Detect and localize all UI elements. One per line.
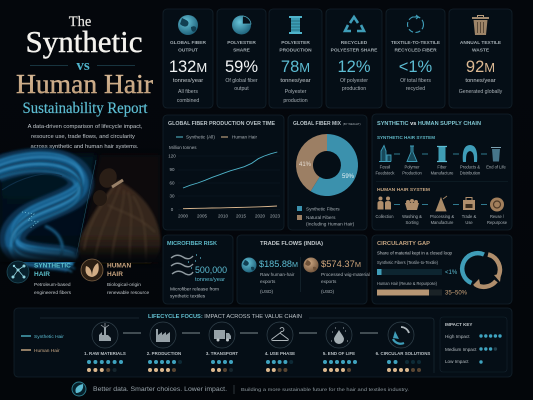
heading: GLOBAL FIBER MIX (293, 121, 341, 127)
stage labels: Distribution (460, 170, 481, 176)
donut legend (297, 206, 355, 226)
impact key: IMPACT KEY (445, 322, 472, 327)
axis labels: 2023 (270, 214, 281, 218)
stat card: polyester share (217, 9, 266, 108)
impact key: High Impact (445, 334, 470, 339)
label: PRODUCTION (279, 48, 312, 54)
description: combined (177, 98, 199, 104)
axis labels: 0 (171, 207, 174, 212)
icon: spool (289, 17, 302, 33)
description: All fibers (178, 89, 198, 95)
processed exports (304, 258, 370, 294)
synthetic hair label (7, 261, 72, 296)
stage labels: Products & (460, 164, 480, 170)
stage labels: Trade & (462, 214, 476, 219)
value: 132M (169, 58, 207, 76)
stage labels: Collection (376, 214, 394, 219)
human description: Biological-origin (107, 282, 141, 288)
subheading: Share of material kept in a closed loop (377, 250, 452, 256)
axis labels (168, 145, 281, 218)
subtitle: Sustainability Report (22, 100, 148, 117)
icon: tan globe (304, 258, 318, 272)
legend: Human Hair (34, 348, 60, 354)
stage 6: circular solutions: 6. CIRCULAR SOLUTIONS (376, 351, 430, 356)
unit: tonnes/year (280, 78, 311, 84)
stage 2: production (147, 322, 182, 372)
stage labels: Reuse / (490, 214, 505, 219)
label: POLYESTER SHARE (331, 48, 378, 54)
description: Of global fiber (225, 78, 258, 84)
human hair label (81, 259, 149, 296)
title: vs with rules: vs (76, 58, 90, 74)
chart legend: Synthetic (All) (186, 134, 215, 140)
donut chart: 41% (299, 162, 312, 168)
title: Human Hair: Human Hair (16, 68, 153, 99)
panel: global fiber mix: (BY WEIGHT) (343, 122, 361, 126)
donut legend: Natural Fibers (306, 215, 336, 220)
value: 500,000 (195, 265, 227, 276)
legend (21, 334, 64, 354)
axis labels: 2010 (218, 214, 229, 218)
icon: waves and particles (171, 255, 201, 275)
icon: collection people (378, 196, 391, 210)
stage 3: transport: 3. TRANSPORT (206, 351, 238, 356)
axis labels: 2005 (197, 214, 208, 218)
description: production (342, 86, 366, 92)
unit: tonnes/year (465, 78, 496, 84)
donut chart: 59% (342, 174, 355, 180)
axis labels: 2000 (178, 214, 189, 218)
stage labels: Production (402, 170, 423, 176)
label: OUTPUT (178, 48, 198, 54)
icon: trade box (463, 198, 475, 210)
panel: supply chain (372, 114, 512, 230)
synthetic system: SYNTHETIC HAIR SYSTEM (377, 135, 435, 141)
description: Processed wig-material (321, 272, 370, 277)
unit: tonnes/year (173, 78, 203, 84)
impact key (440, 317, 507, 372)
line: synthetic (183, 152, 277, 188)
heading: SYNTHETIC vs HUMAN SUPPLY CHAIN (377, 121, 481, 127)
heading: CIRCULARITY GAP (377, 241, 430, 247)
axis labels: 30 (169, 194, 175, 198)
intro text: resource use, trade flows, and circularity (31, 134, 135, 140)
label: WASTE (472, 48, 490, 54)
axis labels: Million tonnes (169, 145, 197, 150)
stage labels: Manufacture (431, 170, 454, 176)
stage labels: Sorting (406, 220, 419, 225)
stage 3: transport (206, 322, 238, 372)
icon: reuse circle (490, 198, 504, 212)
icon: trash bin (472, 16, 489, 35)
panel: microfiber risk (163, 235, 233, 304)
value: 12% (337, 58, 371, 76)
description: Of total fibers (400, 78, 431, 84)
stage labels: Repurpose (487, 220, 508, 225)
description: recycled (406, 86, 425, 92)
axis labels: 2015 (236, 214, 247, 218)
chart legend (176, 134, 257, 140)
icon: fiber spool (437, 146, 447, 162)
donut legend: (Including Human Hair) (306, 222, 355, 226)
label: POLYESTER (281, 40, 310, 46)
impact key: Low Impact (445, 359, 469, 364)
legend: Synthetic Hair (34, 334, 64, 340)
label: RECYCLED (341, 40, 368, 46)
icon: washing basin (405, 199, 419, 210)
synthetic description: Petroleum-based (34, 282, 71, 288)
icon: molecule (7, 261, 29, 283)
panel: lifecycle focus (14, 308, 512, 377)
icon: polymer flask (407, 146, 417, 162)
stat card: polyester production (269, 9, 322, 108)
icon: recycle (345, 17, 364, 31)
impact key: Medium Impact (445, 347, 477, 352)
donut legend: Synthetic Fibers (306, 206, 340, 212)
donut chart (296, 134, 358, 196)
stage 5: end of life: 5. END OF LIFE (323, 351, 355, 356)
stage labels: Use (465, 220, 473, 225)
stat card: recycled polyester share (326, 9, 382, 108)
panel: trade flows (237, 235, 370, 304)
icon: pie (232, 16, 251, 34)
closing statement: Building a more sustainable future for the hair and textiles industry. (241, 387, 409, 393)
icon: teal globe (242, 258, 256, 272)
panel: line chart (163, 115, 284, 230)
bar: synthetic (377, 260, 458, 276)
arrows (123, 332, 378, 334)
description: Polyester (285, 89, 307, 95)
heading: MICROFIBER RISK (167, 241, 217, 247)
icon: bin (491, 148, 501, 162)
description: (USD) (260, 289, 273, 294)
axis labels: 60 (169, 180, 175, 186)
divider (75, 160, 96, 262)
stage labels: Fossil (380, 164, 390, 170)
description: Generated globally (459, 89, 503, 95)
description: Of polyester (340, 78, 368, 84)
description: synthetic textiles (170, 294, 206, 300)
ring chart (462, 253, 501, 288)
stage 5: end of life (323, 322, 357, 372)
stage 2: production: 2. PRODUCTION (147, 351, 181, 356)
title: Synthetic: Synthetic (26, 24, 142, 59)
label: SHARE (233, 48, 251, 54)
stat card: textile-to-textile recycled fiber (386, 9, 445, 108)
description: (USD) (321, 289, 334, 294)
stage 1: raw materials (84, 322, 126, 372)
icon: fossil feedstock (379, 146, 391, 162)
human heading: HAIR (107, 271, 123, 278)
stage labels: Processing & (430, 214, 454, 219)
human hair bundle (78, 155, 161, 264)
stage labels: End of Life (486, 164, 507, 170)
bar: synthetic: <1% (445, 270, 458, 276)
description: Raw human-hair (260, 272, 295, 277)
stage labels: Fiber (437, 164, 447, 170)
description: production (283, 98, 308, 104)
value: $185.88M (259, 259, 298, 270)
intro text: across synthetic and human hair systems. (31, 144, 139, 150)
chart heading: GLOBAL FIBER PRODUCTION OVER TIME (168, 121, 275, 127)
icon: globe (178, 15, 198, 35)
value: 59% (225, 58, 258, 76)
hero image: synthetic and human hair (0, 153, 162, 272)
value: 92M (466, 58, 495, 76)
heading: TRADE FLOWS (INDIA) (260, 241, 323, 247)
value: 78M (281, 58, 310, 76)
human heading: HUMAN (107, 262, 131, 270)
icon: processing hair tool (436, 196, 447, 211)
axis labels: 90 (169, 167, 175, 172)
unit: tonnes/year (195, 277, 225, 283)
value: <1% (399, 58, 433, 76)
panel: circularity gap (372, 235, 512, 304)
synthetic heading: SYNTHETIC (34, 262, 71, 270)
description: output (234, 86, 249, 92)
label: RECYCLED FIBER (394, 48, 437, 54)
synthetic description: engineered fibers (34, 290, 72, 296)
icon: dashed circular arrow (408, 15, 424, 32)
axis labels: 2020 (255, 214, 266, 218)
title: The: The (69, 14, 91, 30)
footer (72, 382, 409, 396)
label: TEXTILE-TO-TEXTILE (391, 40, 441, 46)
tagline: Better data. Smarter choices. Lower impact. (93, 386, 227, 393)
description: Microfiber release from (170, 286, 219, 292)
arrows (394, 204, 487, 206)
label: POLYESTER (227, 40, 256, 46)
stage 1: raw materials: 1. RAW MATERIALS (84, 351, 126, 356)
human system (376, 187, 508, 225)
stage 4: use phase: 4. USE PHASE (265, 351, 295, 356)
description: exports (321, 279, 337, 284)
stage 6: circular solutions (376, 322, 430, 372)
label: GLOBAL FIBER (170, 40, 206, 46)
stat card: annual textile waste (449, 9, 512, 108)
raw exports (242, 258, 298, 294)
line: human hair (183, 206, 277, 209)
heading: LIFECYCLE FOCUS: IMPACT ACROSS THE VALUE CHAIN (148, 314, 302, 320)
synthetic heading: HAIR (34, 271, 50, 278)
panel: global fiber mix (288, 115, 367, 230)
icon: leaf badge (72, 382, 86, 396)
stage labels: Feedstock (376, 170, 395, 176)
value: $574.37M (321, 259, 361, 270)
icon: products wig (463, 145, 477, 162)
human system: HUMAN HAIR SYSTEM (377, 187, 430, 193)
title block (16, 14, 153, 150)
intro text: A data-driven comparison of lifecycle impact, (28, 124, 143, 130)
arrows (394, 153, 487, 155)
stage labels: Polymer (404, 164, 420, 170)
bar: human hair: Human Hair (Reuse & Repurpose) (377, 281, 438, 286)
description: exports (260, 279, 276, 284)
stat card: global fiber output (163, 9, 213, 108)
human description: renewable resource (107, 290, 149, 296)
bar: human hair (377, 281, 468, 296)
label: ANNUAL TEXTILE (460, 40, 502, 46)
stage labels: Washing & (402, 214, 422, 219)
chart legend: Human Hair (232, 134, 257, 140)
synthetic hair strands (0, 153, 96, 272)
stage 4: use phase (265, 322, 295, 372)
stage labels: Manufacture (431, 220, 454, 225)
bar: synthetic: Synthetic Fibers (Textile-to-Textile) (377, 260, 439, 265)
bar: human hair: 35–50% (445, 290, 468, 296)
synthetic system (376, 135, 507, 176)
icon: leaf (81, 259, 103, 281)
axis labels: 120 (168, 154, 176, 158)
